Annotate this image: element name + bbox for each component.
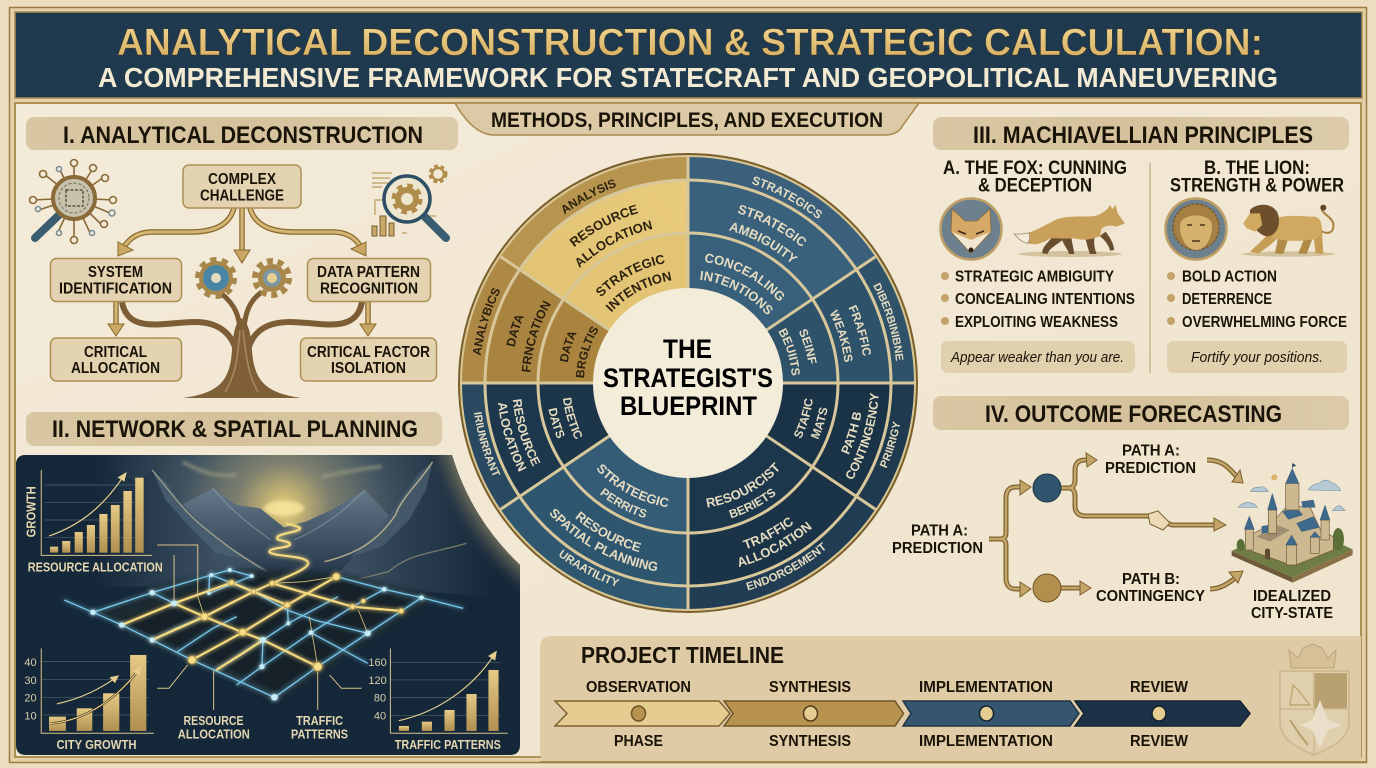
timeline labels bottom (614, 733, 1189, 750)
box: data pattern recognition: RECOGNITION (320, 280, 418, 298)
title line two: A COMPREHENSIVE FRAMEWORK FOR STATECRAFT AND GEOPOLITICAL MANEUVERING (98, 62, 1278, 93)
chart: city growth: CITY GROWTH (56, 737, 136, 752)
timeline labels bottom: IMPLEMENTATION (919, 733, 1053, 750)
panel: network map (16, 455, 520, 755)
chart: traffic patterns: TRAFFIC PATTERNS (395, 737, 501, 752)
panel: project timeline (540, 636, 1366, 762)
chart: traffic patterns: 80 (374, 693, 386, 705)
lion quote: Fortify your positions. (1191, 349, 1323, 366)
wheel hub: THE (663, 334, 712, 364)
fox heading (943, 158, 1127, 196)
icon: gear left (198, 260, 234, 296)
wheel labels: lower: RESOURCE (575, 511, 642, 552)
wheel labels: upper gold: FRNCATION (522, 300, 551, 372)
crest emblem (1280, 644, 1349, 755)
fox bullets: EXPLOITING WEAKNESS (955, 314, 1118, 331)
chart: city growth (24, 648, 154, 752)
wheel labels: lower: PRIIRIGY (880, 421, 900, 468)
icon: fox medallion (940, 198, 1002, 260)
wheel labels: upper gold: INTENTION (606, 272, 672, 312)
fox heading: A. THE FOX: CUNNING (943, 158, 1127, 179)
wheel halo on map edge (430, 455, 520, 588)
label: path a prediction (1105, 442, 1196, 477)
box: critical allocation (50, 338, 182, 381)
tree with gears (122, 260, 362, 398)
wheel labels: lower: MATS (810, 408, 828, 440)
map label: resource allocation: ALLOCATION (178, 726, 250, 741)
fox bullets: CONCEALING INTENTIONS (955, 291, 1135, 308)
lion bullets (1167, 268, 1347, 331)
label: path a root: PREDICTION (892, 540, 983, 557)
methods banner: METHODS, PRINCIPLES, AND EXECUTION (491, 109, 883, 132)
ring middle sectors (485, 180, 891, 586)
lion heading (1170, 158, 1344, 196)
node: gold (1033, 574, 1061, 602)
wheel labels: upper gold: ANALYSIS (562, 180, 616, 214)
lion quote (1167, 341, 1347, 373)
chart: traffic patterns: 40 (374, 710, 386, 722)
label: idealized city-state (1251, 588, 1333, 622)
wheel labels: lower: ENDORGEMENT (746, 542, 826, 590)
icon: fox walking (1014, 205, 1125, 257)
map label: traffic patterns: PATTERNS (291, 726, 348, 741)
wheel labels: upper gold: ANALYBICS (473, 288, 500, 356)
lion bullets: BOLD ACTION (1182, 268, 1277, 286)
label: path b contingency: PATH B: (1122, 571, 1180, 588)
heading III: III. MACHIAVELLIAN PRINCIPLES (973, 122, 1313, 149)
timeline chevrons (555, 701, 1250, 726)
wheel labels: lower: ALOCATION (498, 402, 526, 472)
lion bullets: DETERRENCE (1182, 291, 1272, 308)
title line one: ANALYTICAL DECONSTRUCTION & STRATEGIC CALCULATION: (117, 22, 1263, 64)
wheel hub: STRATEGIST'S (603, 363, 773, 393)
map label: traffic patterns: TRAFFIC (296, 713, 344, 728)
wheel labels: lower: ALLOCATION (739, 522, 812, 567)
box: critical factor isolation: CRITICAL FACTOR (307, 344, 430, 361)
mountain valley scene (0, 453, 530, 752)
wheel labels: lower: IRIUNRRANT (474, 412, 500, 476)
label: path a root: PATH A: (911, 522, 968, 540)
chart: resource allocation (23, 470, 163, 575)
wheel labels: upper blue: CONCEALING (705, 254, 784, 301)
wheel labels: lower: CONTINGENCY (846, 392, 878, 479)
label: path b contingency (1096, 571, 1205, 605)
chart: city growth: 20 (24, 693, 37, 705)
wheel labels: lower: PERRITS (600, 488, 647, 518)
box: system identification: IDENTIFICATION (59, 280, 172, 298)
arrows: challenge branches (108, 208, 376, 336)
chart: traffic patterns (368, 648, 508, 752)
wheel labels: upper blue: INTENTIONS (700, 270, 773, 314)
map label: traffic patterns (292, 716, 348, 738)
ring inner sectors (538, 233, 838, 533)
timeline labels top: SYNTHESIS (769, 679, 851, 696)
leader lines (157, 545, 362, 710)
wheel labels: lower: SPATIAL PLANNING (550, 508, 658, 571)
wheel hub (593, 288, 783, 478)
label: path a prediction: PATH A: (1122, 442, 1180, 460)
timeline labels bottom: REVIEW (1130, 733, 1189, 750)
wheel labels: upper blue: STRATEGIC (738, 205, 806, 246)
fox quote: Appear weaker than you are. (950, 349, 1124, 366)
ring outer sectors (462, 157, 914, 609)
fox bullets: STRATEGIC AMBIGUITY (955, 268, 1114, 286)
panel: III. machiavellian principles (933, 117, 1349, 373)
chart: traffic patterns: 120 (368, 675, 387, 687)
wheel labels: upper gold: DATA (560, 332, 577, 362)
wheel hub: BLUEPRINT (620, 391, 757, 421)
heading IV (933, 396, 1349, 430)
wheel labels: upper gold: DATA (506, 316, 524, 347)
box: system identification (50, 258, 182, 302)
wheel labels: lower: RESOURCE (512, 399, 540, 466)
chart: city growth: 10 (24, 710, 37, 722)
heading I: I. ANALYTICAL DECONSTRUCTION (63, 122, 423, 149)
wheel labels: upper gold: STRATEGIC (596, 255, 665, 296)
timeline labels top: IMPLEMENTATION (919, 679, 1053, 696)
chart: resource allocation: GROWTH (23, 486, 39, 537)
fox heading: & DECEPTION (978, 176, 1092, 196)
network nodes gold (188, 573, 404, 671)
wheel labels: upper blue: STRATEGICS (752, 176, 822, 218)
timeline labels top: REVIEW (1130, 679, 1189, 696)
wheel labels: upper blue: BEUIITS (778, 328, 800, 376)
wheel labels: lower: STRATEEGIC (597, 464, 669, 507)
wheel labels: lower: TRAFFIC (742, 518, 793, 548)
box: critical allocation: ALLOCATION (71, 360, 160, 377)
lion heading: B. THE LION: (1204, 158, 1310, 179)
terrain (144, 566, 431, 697)
icon: lion medallion (1166, 198, 1226, 260)
wheel labels: lower: URAATILITY (560, 550, 620, 586)
wheel labels: upper gold (473, 180, 672, 378)
label: path b contingency: CONTINGENCY (1096, 588, 1205, 605)
map label: resource allocation: RESOURCE (184, 713, 244, 728)
wheel labels: lower: STAFIC (794, 398, 812, 438)
icon: lion walking (1242, 205, 1335, 257)
box: data pattern recognition (308, 258, 430, 302)
label: idealized city-state: CITY-STATE (1251, 605, 1333, 622)
box: critical factor isolation: ISOLATION (331, 360, 406, 377)
label: path a prediction: PREDICTION (1105, 460, 1196, 477)
heading II: II. NETWORK & SPATIAL PLANNING (52, 416, 418, 443)
label: path a root (892, 522, 983, 557)
timeline labels bottom: SYNTHESIS (769, 733, 851, 750)
blue grid (64, 570, 463, 697)
box: critical factor isolation (300, 338, 436, 381)
wheel labels: upper blue: DIBERBINIBNE (873, 282, 904, 361)
title banner (15, 12, 1362, 98)
wheel labels: lower: BERIETS (728, 488, 776, 518)
lion heading: STRENGTH & POWER (1170, 176, 1344, 196)
chart: city growth: 40 (24, 657, 37, 669)
heading IV: IV. OUTCOME FORECASTING (985, 401, 1282, 428)
decision arrows (989, 453, 1243, 597)
chart: city growth: 30 (24, 675, 37, 687)
map label: resource allocation (178, 716, 250, 738)
icon: gear right (255, 261, 289, 295)
wheel labels: lower: PATH B (841, 412, 861, 454)
timeline labels top: OBSERVATION (586, 679, 691, 696)
wheel labels: lower: DEETIC (563, 398, 582, 439)
box: complex challenge (183, 165, 301, 208)
wheel labels: upper gold: BRGLTIS (576, 326, 598, 378)
label: idealized city-state: IDEALIZED (1253, 588, 1331, 605)
wheel labels: upper blue: WEAKES (830, 309, 852, 362)
timeline labels top (586, 679, 1189, 696)
box: critical allocation: CRITICAL (84, 344, 147, 361)
lion bullets: OVERWHELMING FORCE (1182, 314, 1347, 331)
wheel labels: upper blue: FRAFFIC (848, 304, 871, 356)
node: blue (1033, 474, 1061, 502)
panel: I. analytical deconstruction (26, 117, 458, 398)
box: complex challenge: COMPLEX (208, 171, 276, 188)
wheel labels: upper blue (700, 176, 904, 376)
icon: circuit magnifier (30, 160, 116, 244)
panel: IV. outcome forecasting (892, 396, 1353, 622)
methods banner (455, 103, 919, 135)
fox quote (941, 341, 1135, 373)
icon: gear magnifier and chart (372, 166, 446, 238)
wheel labels: upper gold: ALLOCATION (576, 220, 652, 268)
wheel labels: upper blue: SEINF (800, 329, 817, 364)
wheel labels: lower: RESOURCIST (706, 462, 779, 508)
timeline heading: PROJECT TIMELINE (581, 642, 784, 668)
network nodes blue (90, 568, 424, 701)
wheel labels: upper gold: RESOURCE (569, 204, 638, 247)
fox bullets (941, 268, 1135, 331)
box: system identification: SYSTEM (88, 264, 143, 281)
chart: resource allocation: RESOURCE ALLOCATION (28, 560, 163, 575)
wheel: the strategist's blueprint (458, 153, 918, 613)
icon: idealized city-state castle (1232, 463, 1353, 583)
timeline labels bottom: PHASE (614, 733, 663, 750)
wheel labels: lower: DATS (548, 408, 564, 438)
gold grid (122, 523, 401, 670)
chart: traffic patterns: 160 (368, 657, 387, 669)
box: complex challenge: CHALLENGE (200, 188, 284, 204)
wheel labels: lower (474, 392, 900, 590)
box: data pattern recognition: DATA PATTERN (317, 264, 420, 281)
wheel labels: upper blue: AMBIGUITY (728, 222, 798, 262)
